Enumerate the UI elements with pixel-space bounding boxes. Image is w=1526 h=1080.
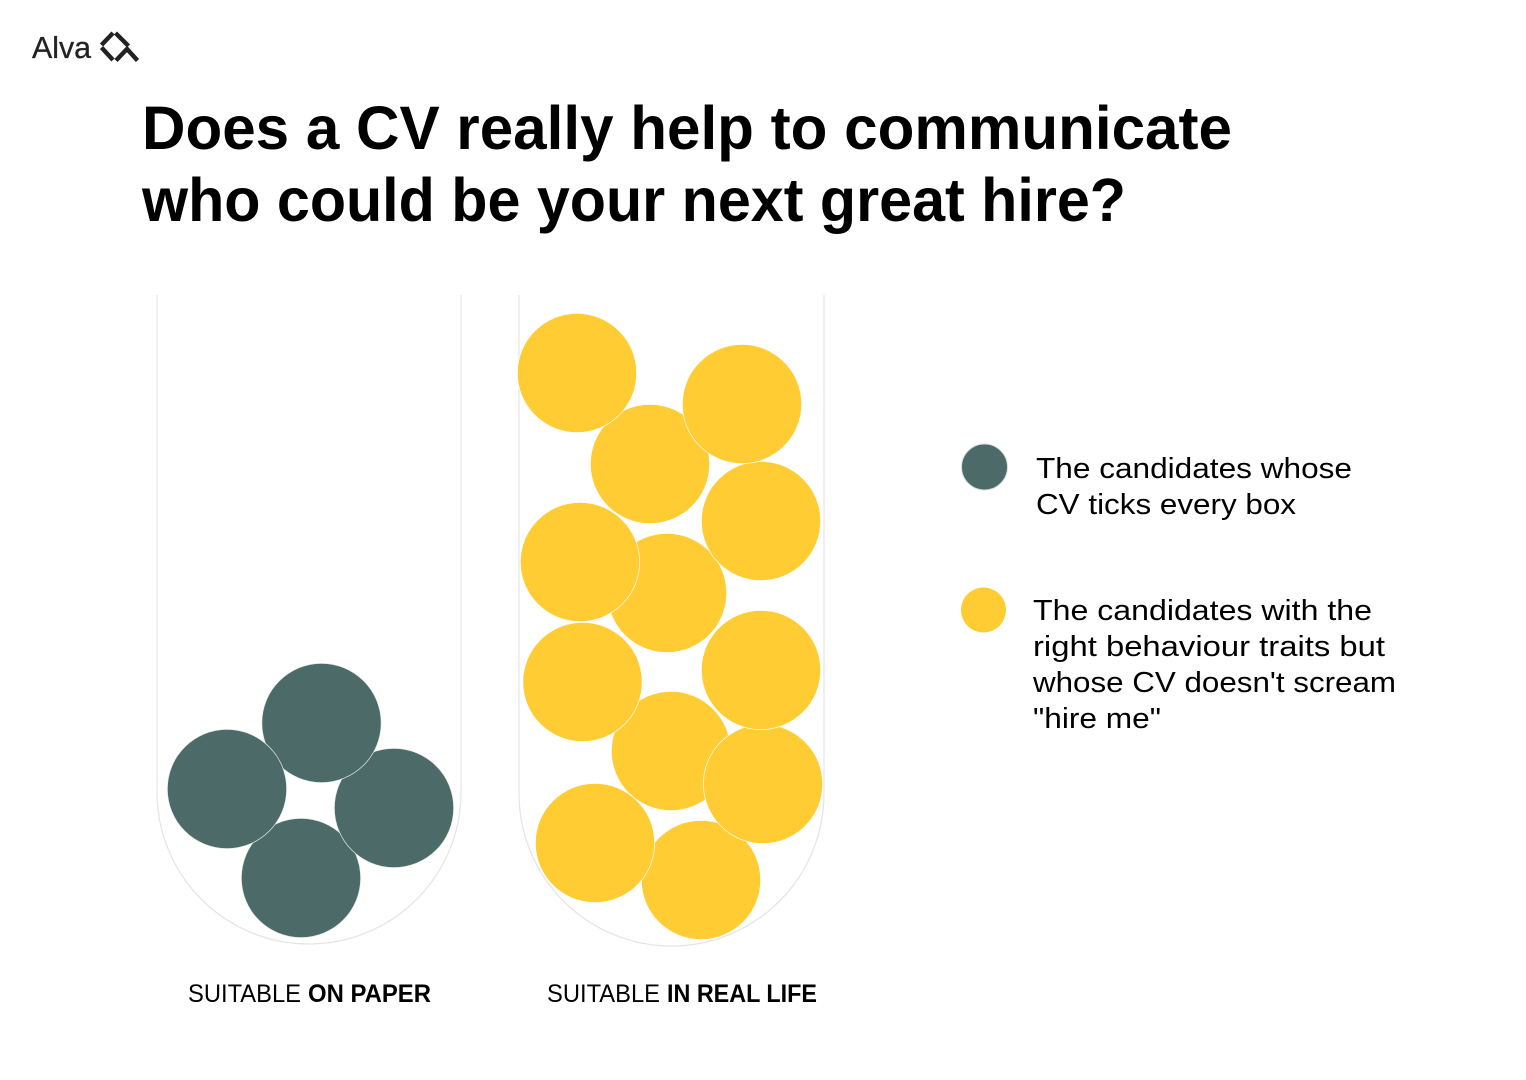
legend text: CV ticks every box: The candidates whose — [1036, 453, 1352, 485]
tube outline: on paper — [157, 295, 461, 944]
legend: yellow dot — [961, 588, 1006, 632]
title: who could be your next great hire? — [141, 166, 1126, 234]
legend text: right behaviour traits: "hire me" — [1033, 703, 1161, 735]
caption: suitable on paper: ON PAPER — [308, 980, 431, 1008]
green candidate circles — [168, 664, 453, 937]
caption: suitable in real life — [547, 980, 817, 1008]
legend text: right behaviour traits: right behaviour traits but — [1033, 631, 1385, 663]
yellow candidate circles — [518, 314, 822, 939]
legend text: right behaviour traits: whose CV doesn't scream — [1032, 667, 1396, 699]
caption: suitable on paper: SUITABLE — [188, 980, 301, 1008]
caption: suitable in real life: SUITABLE — [547, 980, 660, 1008]
logo: Alva — [32, 30, 138, 65]
legend text: CV ticks every box — [1036, 453, 1352, 521]
caption: suitable on paper — [188, 980, 431, 1008]
legend text: right behaviour traits: The candidates with the — [1033, 595, 1372, 627]
panel: suitable on paper tube — [157, 295, 461, 944]
logo: Alva: Alva — [32, 30, 92, 65]
tube outline: in real life — [519, 295, 824, 946]
legend: green dot — [962, 444, 1008, 490]
title — [141, 94, 1232, 234]
panel: suitable in real life tube — [518, 295, 824, 946]
legend text: right behaviour traits — [1032, 595, 1396, 735]
title: Does a CV really help to communicate — [142, 94, 1232, 162]
caption: suitable in real life: IN REAL LIFE — [667, 980, 817, 1008]
legend text: CV ticks every box: CV ticks every box — [1036, 489, 1297, 521]
